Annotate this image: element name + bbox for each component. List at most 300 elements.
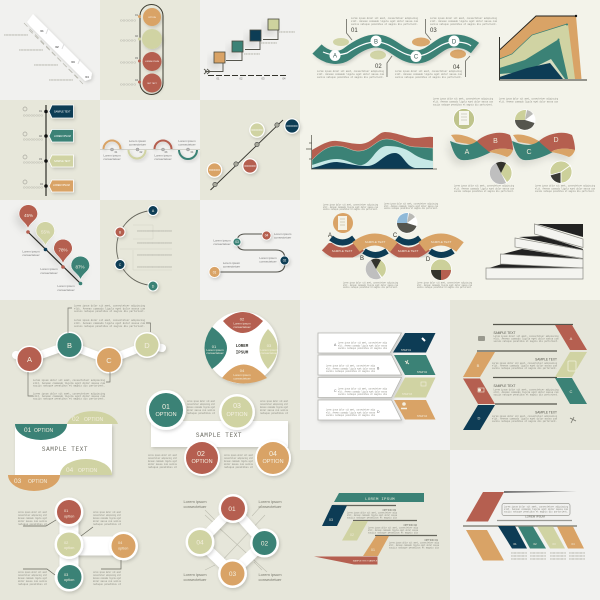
panel: T-shaped option nodes <box>18 498 138 592</box>
panel: stepped options with banner: sociis natoque penatibus et magnis dis <box>347 516 397 520</box>
panel: chevron side list: sociis natoque penatibus et magnis dis parturient. <box>492 419 557 423</box>
panel: slanted parallelogram columns: 01 <box>513 542 517 546</box>
panel: percentage map pins: 87% <box>75 264 85 270</box>
panel: slanted parallelogram columns: 03 <box>552 542 556 546</box>
panel: arched sample text ribbon: A <box>328 233 332 239</box>
panel: capsule timeline: 03 <box>135 56 138 60</box>
panel: arc with four nodes: D <box>152 284 155 288</box>
panel: sample text circles: Lorem ipsum dolor sit amet <box>187 399 215 403</box>
panel: T-shaped option nodes: dolor massa cum sociis <box>93 579 121 583</box>
panel: ribbon with pie charts: D <box>553 137 559 144</box>
panel: T-shaped option nodes: natoque penatibus et <box>18 522 47 526</box>
panel: sample text circles: Aenean commodo ligula eget <box>148 459 177 463</box>
panel: paper options card: 04 <box>66 467 74 474</box>
panel: lorem ipsum petal circle: 02 <box>240 316 245 322</box>
panel: paper options card: 01 <box>24 427 32 434</box>
panel: stepped options with banner: Lorem ipsum dolor sit amet, consectetuer adip <box>389 540 439 544</box>
panel: T-shaped option nodes: option <box>118 546 128 550</box>
panel: capsule timeline: SET TEXT <box>147 83 158 85</box>
panel: T-shaped option nodes: Aenean commodo ligula eget <box>18 516 47 520</box>
panel: chevron step rows: sociis natoque penatibus et magnis dis <box>338 392 387 396</box>
panel: ribbon with pie charts: elit. Aenean commodo ligula eget dolor massa cum <box>433 100 493 104</box>
panel: stepped options with banner: elit. Aenean commodo ligula eget dolor massa <box>347 513 397 517</box>
panel: winding route: consectetuer <box>259 260 277 264</box>
panel: arc with four nodes <box>115 206 172 291</box>
panel: ribbon with pie charts: A <box>465 149 470 156</box>
panel: chevron side list: C <box>570 389 573 394</box>
panel: sample text circles: dolor massa cum sociis <box>187 408 215 412</box>
panel: slanted parallelogram columns: 02 <box>533 542 537 546</box>
panel: vertical tags timeline: LOREM IPSUM <box>54 135 71 138</box>
panel: stepped options with banner: 01 <box>371 548 375 552</box>
panel: chevron side list: elit. Aenean commodo ligula eget dolor massa cum <box>492 416 557 420</box>
panel: capsule timeline: 02 <box>135 34 138 38</box>
panel: semicircle line: Lorem ipsum <box>178 139 196 143</box>
panel: arched sample text ribbon: elit. Aenean commodo ligula eget dolor massa cum <box>417 283 472 287</box>
panel: wave road timeline: Lorem ipsum dolor sit amet, consectetuer adipiscing <box>351 16 418 20</box>
panel: winding route: 04 <box>265 234 268 238</box>
panel: T-shaped option nodes: 03 <box>64 573 68 577</box>
panel: arched sample text ribbon: sociis natoque penatibus et magnis dis parturient. <box>417 285 472 289</box>
panel: chevron step rows <box>318 333 436 420</box>
panel: arched sample text ribbon: sociis natoque penatibus et magnis dis parturient. <box>343 285 398 289</box>
panel: chevron side list: SAMPLE TEXT <box>535 358 557 362</box>
panel: paper options card: SAMPLE TEXT <box>42 446 88 453</box>
panel: slanted parallelogram columns <box>463 491 585 561</box>
panel: paper options card: OPTION <box>78 468 98 474</box>
panel: diamond of four nodes: Lorem ipsum <box>183 499 207 504</box>
panel: arc with four nodes: OOOOOOOOOOOOOOOOOO <box>137 230 172 233</box>
panel: slanted parallelogram columns: OOOOOO <box>511 555 527 558</box>
panel: diagonal ribbon steps: 03 <box>71 60 75 64</box>
panel: stepped options with banner: sociis natoque penatibus et magnis dis <box>368 530 418 534</box>
panel: sample text circles: Lorem ipsum dolor sit amet <box>148 453 177 457</box>
panel: semicircle line <box>100 139 200 161</box>
panel: ribbon with pie charts: elit. Aenean commodo ligula eget dolor massa cum <box>454 186 514 190</box>
panel: semicircle line: 02 <box>140 151 143 154</box>
panel: capsule timeline: OOOOOO <box>120 20 136 22</box>
panel: slanted parallelogram columns: OOOOOO <box>550 558 566 561</box>
panel: winding route: Lorem ipsum <box>259 256 277 260</box>
panel: stepped options with banner: elit. Aenean commodo ligula eget dolor massa <box>368 528 418 532</box>
panel: vertical tags timeline: SAMPLE TEXT <box>54 160 71 163</box>
panel: lorem ipsum petal circle: 01 <box>212 344 217 349</box>
panel: sample text circles: 04 <box>269 451 277 458</box>
panel: arc with four nodes: OOOOOOOOOOOOOOOOOO <box>137 242 172 245</box>
panel: wave road timeline: elit. Aenean commodo ligula eget dolor massa cum <box>395 72 462 76</box>
panel: T-shaped option nodes: 02 <box>64 541 68 545</box>
panel: wave road timeline: Lorem ipsum dolor sit amet, consectetuer adipiscing <box>430 16 497 20</box>
panel: diamond of four nodes: consectetuer <box>184 577 207 582</box>
panel: T-shaped option nodes: consectetuer adipiscing elit <box>18 573 47 577</box>
panel: wave road timeline: 04 <box>453 65 460 71</box>
panel: T-shaped option nodes: natoque penatibus et <box>18 582 47 586</box>
panel: sample text circles: Lorem ipsum dolor sit amet <box>224 453 253 457</box>
panel: wave road timeline: 03 <box>430 28 437 34</box>
panel: vertical tags timeline: SAMPLE TEXT <box>54 110 71 114</box>
panel: sample text circles: dolor massa cum sociis <box>224 462 253 466</box>
panel: arched sample text ribbon <box>323 202 472 289</box>
panel: slanted parallelogram columns: sociis natoque penatibus et magnis dis parturient. <box>504 510 568 514</box>
panel: slanted parallelogram columns: OOOOOO <box>530 555 546 558</box>
panel: diagonal ribbon steps: 02 <box>55 45 59 49</box>
panel: T-shaped option nodes: Lorem ipsum dolor sit amet <box>18 510 47 514</box>
panel: T-shaped option nodes: Lorem ipsum dolor sit amet <box>18 570 47 574</box>
panel: chevron side list: SAMPLE TEXT <box>494 331 515 335</box>
panel: diamond of four nodes: Lorem ipsum <box>258 572 282 577</box>
panel: diagonal ribbon steps: OOOOOOOO <box>34 64 58 67</box>
panel: T-shaped option nodes: Aenean commodo ligula eget <box>93 516 121 520</box>
panel: capsule timeline: OOOOOO <box>120 84 136 86</box>
panel: arched sample text ribbon: Lorem ipsum dolor sit amet, consectetuer adipiscing <box>417 280 472 284</box>
panel: sample text circles: dolor massa cum sociis <box>148 462 177 466</box>
panel: chevron step rows: elit. Aenean commodo ligula eget dolor massa <box>326 366 375 370</box>
panel: chevron step rows: STEP 03 <box>402 393 413 396</box>
panel: lorem ipsum petal circle: Lorem ipsum <box>206 348 224 352</box>
panel: ribbon with pie charts: B <box>493 138 498 145</box>
panel: diagonal ribbon steps: OOOOOOOO <box>19 49 43 52</box>
panel: semicircle line: Lorem ipsum <box>154 154 172 158</box>
panel: stepped options with banner <box>314 493 439 564</box>
panel: sample text circles: natoque penatibus et <box>224 465 253 469</box>
panel: wave road timeline: sociis natoque penatibus et magnis dis parturient. <box>395 75 462 79</box>
panel: arched sample text ribbon: Lorem ipsum dolor sit amet, consectetuer adipiscing <box>323 202 378 206</box>
panel: lorem ipsum petal circle <box>204 312 278 384</box>
panel: slanted parallelogram columns: OOOOOO <box>569 552 585 555</box>
panel: zigzag chain A B C D: Lorem ipsum dolor sit amet, consectetuer adipiscing <box>74 304 145 308</box>
panel: chevron step rows: A <box>334 343 337 347</box>
panel: T-shaped option nodes: option <box>64 514 74 518</box>
panel: zigzag chain A B C D: D <box>144 341 150 350</box>
panel: arched sample text ribbon: elit. Aenean commodo ligula eget dolor massa cum <box>384 204 438 208</box>
panel: ribbon with pie charts: sociis natoque penatibus et magnis dis parturient. <box>454 189 514 193</box>
panel: diamond of four nodes <box>183 494 282 588</box>
panel: stepped options with banner: OPTION 01 <box>424 538 439 542</box>
panel: chevron step rows: sociis natoque penatibus et magnis dis <box>326 369 375 373</box>
panel: stepped options with banner: Lorem ipsum dolor sit amet, consectetuer adip <box>368 526 418 530</box>
panel: lorem ipsum petal circle: 03 <box>267 343 272 348</box>
panel: capsule timeline: LOREM IPSUM <box>145 61 159 63</box>
panel: lorem ipsum petal circle: Lorem ipsum <box>233 373 251 377</box>
panel: T-shaped option nodes: consectetuer adipiscing elit <box>93 573 121 577</box>
panel: diamond of four nodes: Lorem ipsum <box>183 572 207 577</box>
panel: wave road timeline: elit. Aenean commodo ligula eget dolor massa cum <box>317 72 384 76</box>
panel: sample text circles: OPTION <box>155 412 177 418</box>
panel: sample text circles: 01 <box>162 404 170 411</box>
panel: semicircle line: consectetuer <box>129 142 146 146</box>
panel: zigzag chain A B C D: A <box>27 355 32 364</box>
panel: slanted parallelogram columns: Lorem ipsum dolor sit amet, consectetuer adipiscing <box>504 504 568 508</box>
panel: sample text circles: 03 <box>233 403 241 410</box>
panel: arched sample text ribbon: SAMPLE TEXT <box>332 249 352 253</box>
panel: diamond of four nodes: 01 <box>228 506 236 513</box>
panel: T-shaped option nodes: consectetuer adipiscing elit <box>93 513 121 517</box>
panel: ascending squares: OOOOO <box>261 42 277 45</box>
panel: lorem ipsum petal circle: LOREM <box>236 345 249 349</box>
panel: zigzag chain A B C D: sociis natoque penatibus et magnis dis parturient. <box>74 309 145 313</box>
panel: wave road timeline: sociis natoque penatibus et magnis dis parturient. <box>317 75 384 79</box>
panel: T-shaped option nodes: consectetuer adipiscing elit <box>18 513 47 517</box>
panel: lorem ipsum petal circle: consectetuer <box>233 325 251 329</box>
panel: winding route: 03 <box>235 240 239 244</box>
panel: slanted parallelogram columns: 04 <box>571 542 575 546</box>
panel: zigzag chain A B C D: sociis natoque penatibus et magnis dis parturient. <box>33 384 105 388</box>
panel: chevron side list <box>463 324 587 430</box>
panel: diagonal ribbon steps <box>4 14 92 84</box>
panel: percentage map pins: 45% <box>24 213 33 218</box>
panel: lorem ipsum petal circle: 04 <box>240 368 245 373</box>
panel: arc with four nodes: A <box>152 209 155 213</box>
panel: ribbon with pie charts: elit. Aenean commodo ligula eget dolor massa cum <box>499 100 558 104</box>
panel: wave road timeline: Lorem ipsum dolor sit amet, consectetuer adipiscing <box>317 69 384 73</box>
panel: sample text circles: Aenean commodo ligula eget <box>260 405 288 409</box>
panel: diagonal line nodes <box>207 119 299 190</box>
panel: ribbon with pie charts: sociis natoque penatibus et magnis dis parturient. <box>433 102 493 106</box>
panel: T-shaped option nodes: 01 <box>64 509 68 513</box>
panel: wave road timeline: Lorem ipsum dolor sit amet, consectetuer adipiscing <box>395 69 462 73</box>
panel: wave road timeline: D <box>452 40 457 46</box>
panel: sample text circles: natoque penatibus et <box>187 411 215 415</box>
panel: diamond of four nodes: consectetuer <box>259 577 282 582</box>
panel: chevron step rows: Lorem ipsum dolor sit amet, consectetuer adip <box>326 408 375 412</box>
panel: capsule timeline: OOOOOO <box>120 40 136 42</box>
panel: stepped options with banner: OPTION 02 <box>403 523 418 527</box>
panel: chevron step rows: STEP 01 <box>401 349 412 352</box>
panel: slanted parallelogram columns: elit. Aenean commodo ligula eget dolor massa cum <box>504 507 568 511</box>
panel: ascending squares: OOOOO <box>244 53 260 56</box>
panel: stepped options with banner: SAMPLE TEXT SAMPLE <box>353 560 378 562</box>
panel: paper options card: 02 <box>72 416 80 423</box>
panel: chevron step rows: Lorem ipsum dolor sit amet, consectetuer adip <box>326 364 375 368</box>
panel: capsule timeline: 04 <box>135 78 138 82</box>
panel: vertical tags timeline: 03 <box>39 157 42 161</box>
panel: sample text circles <box>146 390 291 476</box>
panel: T-shaped option nodes: Lorem ipsum dolor sit amet <box>93 510 121 514</box>
panel: zigzag chain A B C D: sociis natoque penatibus et magnis dis parturient. <box>33 396 105 400</box>
panel: zigzag chain A B C D: Lorem ipsum dolor sit amet, consectetuer adipiscing <box>33 392 105 396</box>
panel: wave road timeline: sociis natoque penatibus et magnis dis parturient. <box>430 22 497 26</box>
panel: T-shaped option nodes: dolor massa cum sociis <box>18 579 47 583</box>
panel: chevron side list: Lorem ipsum dolor sit amet, consectetuer adipiscing <box>492 361 557 365</box>
panel: chevron step rows: C <box>334 389 337 393</box>
panel: wave road timeline: A <box>333 54 337 60</box>
panel: chevron step rows: STEP 02 <box>417 371 428 374</box>
panel: wave road timeline: 01 <box>351 28 358 34</box>
panel: diamond of four nodes: 04 <box>196 540 204 546</box>
panel: chevron side list: D <box>478 416 481 420</box>
panel: chevron side list: elit. Aenean commodo ligula eget dolor massa cum <box>494 336 559 340</box>
panel: chevron step rows: B <box>377 366 380 370</box>
panel: lorem ipsum petal circle: consectetuer <box>206 351 224 355</box>
panel: arched sample text ribbon: B <box>360 256 364 262</box>
panel: diamond of four nodes: Lorem ipsum <box>258 499 282 504</box>
panel: arched sample text ribbon: sociis natoque penatibus et magnis dis parturient. <box>323 207 378 211</box>
panel: vertical tags timeline: OOOOOOOO <box>23 138 43 142</box>
panel: arched sample text ribbon: D <box>426 257 431 263</box>
panel: ascending squares: 03 <box>262 76 265 80</box>
panel: lorem ipsum petal circle: consectetuer <box>260 351 278 355</box>
panel: chevron step rows: STEP 04 <box>417 415 428 418</box>
panel: vertical tags timeline <box>23 105 74 196</box>
panel: chevron side list: A <box>570 336 573 341</box>
panel: zigzag chain A B C D: Lorem ipsum dolor sit amet, consectetuer adipiscing <box>74 318 145 322</box>
panel: winding route: 02 <box>283 258 286 262</box>
panel: diagonal line nodes: OOOOOO <box>286 125 298 128</box>
panel: ribbon with pie charts <box>433 96 595 193</box>
panel: slanted parallelogram columns: OOOOOO <box>511 552 527 555</box>
panel: chevron side list: sociis natoque penatibus et magnis dis parturient. <box>492 366 557 370</box>
panel: slanted parallelogram columns: LOREM IPSUM <box>525 514 545 518</box>
panel: wave road timeline: sociis natoque penatibus et magnis dis parturient. <box>351 22 418 26</box>
panel: diagonal line nodes: OOOOOO <box>244 165 256 168</box>
panel: T-shaped option nodes: dolor massa cum sociis <box>18 519 47 523</box>
panel: slanted parallelogram columns: OOOOOO <box>530 552 546 555</box>
panel: T-shaped option nodes: 04 <box>118 541 122 545</box>
panel: vertical tags timeline: LOREM IPSUM <box>53 184 70 187</box>
panel: chevron side list: Lorem ipsum dolor sit amet, consectetuer adipiscing <box>494 334 559 338</box>
panel: chevron side list: sociis natoque penatibus et magnis dis parturient. <box>494 392 558 396</box>
panel: chevron step rows: sociis natoque penatibus et magnis dis <box>326 413 375 417</box>
panel: stacked angular area chart <box>500 15 587 80</box>
panel: chevron side list: elit. Aenean commodo ligula eget dolor massa cum <box>494 390 559 394</box>
panel: sample text circles: Lorem ipsum dolor sit amet <box>260 399 288 403</box>
panel: chevron step rows: Lorem ipsum dolor sit amet, consectetuer adip <box>338 386 387 390</box>
panel: arched sample text ribbon: SAMPLE TEXT <box>398 249 418 253</box>
panel: arched sample text ribbon: SAMPLE TEXT <box>431 240 451 244</box>
panel: diamond of four nodes: consectetuer <box>259 504 282 509</box>
panel: vertical tags timeline: OOOOOOOO <box>23 186 43 190</box>
panel: T-shaped option nodes: Lorem ipsum dolor sit amet <box>93 570 121 574</box>
panel: semicircle line: Lorem ipsum <box>103 154 121 158</box>
panel: diamond of four nodes: 03 <box>229 571 236 578</box>
panel: sample text circles: consectetuer adipiscing elit <box>260 402 288 406</box>
panel: chevron side list: Lorem ipsum dolor sit amet, consectetuer adipiscing <box>494 388 559 392</box>
panel: arched sample text ribbon: SAMPLE TEXT <box>365 240 385 244</box>
panel: arched sample text ribbon: Lorem ipsum dolor sit amet, consectetuer adipiscing <box>343 280 398 284</box>
panel: ribbon with pie charts: Lorem ipsum dolor sit amet, consectetuer adipiscing <box>433 96 493 100</box>
panel: T-shaped option nodes: natoque penatibus et <box>93 522 121 526</box>
panel: winding route: Lorem ipsum <box>223 261 241 265</box>
panel: sample text circles: SAMPLE TEXT <box>196 432 242 439</box>
panel: percentage map pins: consectetuer <box>40 271 58 275</box>
panel: paper options card: OPTION <box>28 479 48 485</box>
panel: slanted parallelogram columns: OOOOOO <box>530 558 546 561</box>
panel: stepped options with banner: 02 <box>350 533 354 537</box>
panel: slanted parallelogram columns: OOOOOO <box>511 558 527 561</box>
panel: diagonal ribbon steps: OOOOOOOO <box>49 79 73 82</box>
panel: slanted parallelogram columns: OOOOOO <box>569 555 585 558</box>
panel: capsule timeline <box>120 4 163 94</box>
panel: arched sample text ribbon: Lorem ipsum dolor sit amet, consectetuer adipiscing <box>384 202 438 206</box>
panel: vertical tags timeline: 02 <box>39 134 42 138</box>
panel: T-shaped option nodes: dolor massa cum sociis <box>93 519 121 523</box>
panel: diagonal ribbon steps: 01 <box>40 29 44 33</box>
panel: T-shaped option nodes: option <box>64 546 74 550</box>
panel: diagonal ribbon steps: 04 <box>85 75 89 79</box>
panel: chevron step rows: Lorem ipsum dolor sit amet, consectetuer adip <box>338 340 387 344</box>
panel: percentage map pins <box>19 205 90 292</box>
panel: ascending squares: 04 <box>283 76 286 80</box>
panel: percentage map pins: 78% <box>58 248 68 252</box>
panel: winding route: Lorem ipsum <box>274 232 292 236</box>
panel: ribbon with pie charts: C <box>526 149 532 156</box>
panel: percentage map pins: Lorem ipsum <box>40 267 58 271</box>
panel: zigzag chain A B C D: elit. Aenean commodo ligula eget dolor massa cum <box>33 394 105 398</box>
panel: winding route <box>209 231 292 278</box>
panel: diagonal ribbon steps: OOOOOOOO <box>4 34 28 37</box>
panel: sample text circles: Aenean commodo ligula eget <box>224 459 253 463</box>
panel: sample text circles: OPTION <box>226 412 248 418</box>
panel: ascending squares: 02 <box>240 76 243 80</box>
panel: diagonal line nodes: OOOOOO <box>251 129 263 132</box>
panel: chevron step rows: D <box>377 410 380 414</box>
panel: zigzag chain A B C D: C <box>106 356 112 365</box>
panel: sample text circles: consectetuer adipiscing elit <box>224 456 253 460</box>
panel: winding route: Lorem ipsum <box>213 238 231 242</box>
panel: ascending squares: 01 <box>217 76 220 80</box>
panel: lorem ipsum petal circle: consectetuer <box>233 376 251 380</box>
panel: vertical tags timeline: 04 <box>40 182 43 186</box>
panel: capsule timeline: OOOOOO <box>120 62 136 64</box>
panel: zigzag chain A B C D: Lorem ipsum dolor sit amet, consectetuer adipiscing <box>33 378 105 382</box>
panel: semicircle line: 04 <box>191 151 194 154</box>
panel: paper options card: 03 <box>14 478 22 485</box>
panel: chevron side list: B <box>477 363 480 368</box>
panel: percentage map pins: Lorem ipsum <box>22 250 40 254</box>
panel: vertical tags timeline: 01 <box>39 109 42 113</box>
panel: winding route: 01 <box>213 270 216 274</box>
panel: stepped options with banner: OPTION 03 <box>382 508 397 512</box>
panel: zigzag chain A B C D: elit. Aenean commodo ligula eget dolor massa cum <box>74 321 145 325</box>
panel: vertical tags timeline: OOOOOOOO <box>23 162 43 164</box>
panel: paper options card: OPTION <box>84 417 104 423</box>
panel: wave road timeline: elit. Aenean commodo ligula eget dolor massa cum <box>351 19 418 23</box>
panel: zigzag chain A B C D <box>16 304 162 400</box>
panel: sample text circles: dolor massa cum sociis <box>260 408 288 412</box>
panel: wave road timeline: B <box>374 40 378 46</box>
panel: paper options card <box>8 411 118 491</box>
panel: percentage map pins: consectetuer <box>22 253 40 257</box>
panel: arc with four nodes: OOOOOOOOOOOOOOOOOO <box>137 266 172 269</box>
panel: semicircle line: Lorem ipsum <box>129 139 147 143</box>
panel: lorem ipsum petal circle: Lorem ipsum <box>233 322 251 326</box>
panel: winding route: consectetuer <box>213 242 231 246</box>
panel: stepped options with banner: LOREM IPSUM <box>365 498 395 502</box>
panel: stepped options with banner: Lorem ipsum dolor sit amet, consectetuer adip <box>347 510 397 514</box>
panel: ribbon with pie charts: Lorem ipsum dolor sit amet, consectetuer adipiscing <box>499 96 558 100</box>
panel: semicircle line: consectetuer <box>154 157 172 161</box>
panel: stepped options with banner: 03 <box>329 518 333 522</box>
panel: percentage map pins: consectetuer <box>57 288 75 292</box>
panel: paper options card: OPTION <box>34 428 54 434</box>
panel: T-shaped option nodes: Aenean commodo ligula eget <box>93 576 121 580</box>
panel: sample text circles: Aenean commodo ligula eget <box>187 405 215 409</box>
panel: chevron side list: Lorem ipsum dolor sit amet, consectetuer adipiscing <box>492 414 557 418</box>
panel: slanted parallelogram columns: OOOOOO <box>569 558 585 561</box>
panel: chevron side list: SAMPLE TEXT <box>535 410 557 414</box>
panel: capsule timeline: OPTION <box>148 17 156 19</box>
panel: 3D staircase <box>486 224 583 279</box>
panel: T-shaped option nodes: option <box>64 578 74 582</box>
panel: stepped options with banner: sociis natoque penatibus et magnis dis <box>389 546 439 550</box>
panel: wave road timeline <box>317 16 497 79</box>
panel: wave road timeline: C <box>414 54 419 60</box>
panel: percentage map pins: 55% <box>41 230 50 234</box>
panel: sample text circles: consectetuer adipiscing elit <box>187 402 215 406</box>
panel: chevron step rows: elit. Aenean commodo ligula eget dolor massa <box>338 344 387 348</box>
panel: zigzag chain A B C D: B <box>67 341 72 350</box>
panel: semicircle line: consectetuer <box>178 142 196 146</box>
